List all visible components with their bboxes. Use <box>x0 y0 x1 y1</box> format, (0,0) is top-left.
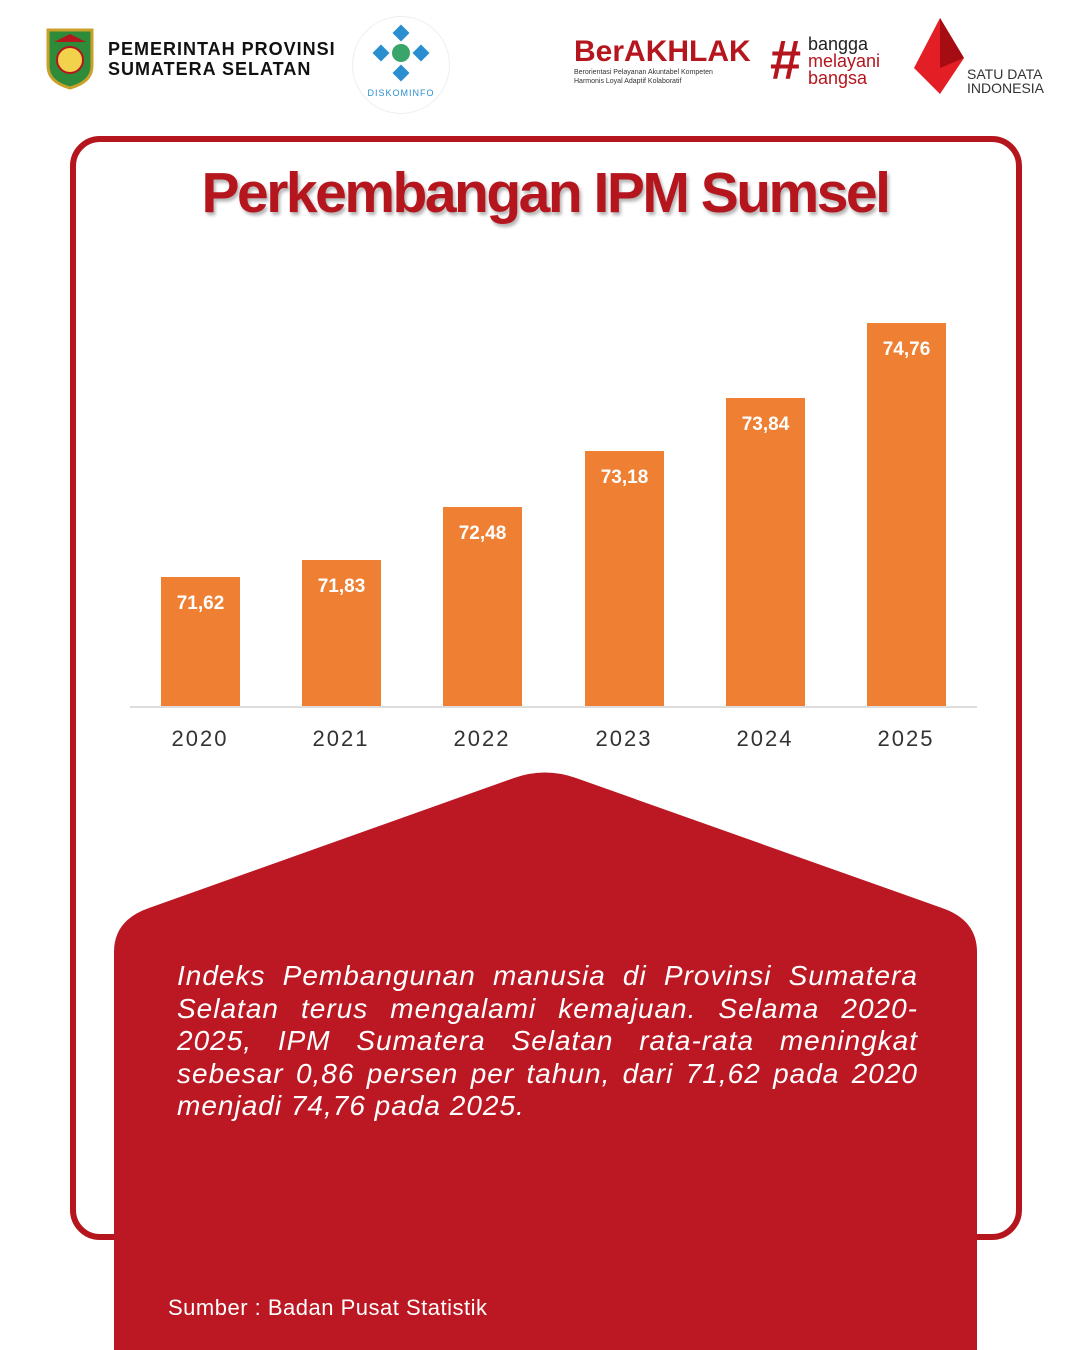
header: province name: PEMERINTAH PROVINSI <box>108 39 336 59</box>
bar chart: 2024 <box>737 726 793 751</box>
bar chart <box>130 323 977 751</box>
header: BerAKHLAK logo <box>574 35 751 85</box>
header: bangga melayani bangsa: # <box>770 28 801 91</box>
title: Perkembangan IPM Sumsel <box>202 161 888 225</box>
bar 2024 <box>726 398 805 706</box>
description text: 2025, IPM Sumatera Selatan rata-rata meningkat <box>177 1025 918 1056</box>
header: bangga melayani bangsa <box>770 28 880 91</box>
header: BerAKHLAK logo: Harmonis Loyal Adaptif Kolaboratif <box>574 78 681 85</box>
description text: menjadi 74,76 pada 2025. <box>177 1090 525 1121</box>
bar chart: 2021 <box>313 726 369 751</box>
bar chart: 2023 <box>596 726 652 751</box>
header: bangga melayani bangsa: bangga <box>808 34 868 54</box>
bar 2025 <box>867 323 946 706</box>
header: Satu Data Indonesia <box>914 18 1044 96</box>
header: diskominfo logo <box>352 16 450 114</box>
red description panel <box>114 772 977 1350</box>
bar 2021: 71,83 <box>318 576 365 597</box>
bar 2023: 73,18 <box>601 467 648 488</box>
header: diskominfo logo: DISKOMINFO <box>367 88 434 98</box>
header: bangga melayani bangsa: bangsa <box>808 68 867 88</box>
bar 2023 <box>585 451 664 706</box>
description text: Selatan terus mengalami kemajuan. Selama 2020- <box>177 992 918 1024</box>
description text <box>176 960 918 1121</box>
bar chart: 2022 <box>454 726 510 751</box>
header: BerAKHLAK logo: Berorientasi Pelayanan Akuntabel Kompeten <box>574 69 713 76</box>
header: Satu Data Indonesia: INDONESIA <box>967 80 1044 96</box>
bar 2020: 71,62 <box>177 593 224 614</box>
source: Sumber : Badan Pusat Statistik <box>168 1295 488 1320</box>
bar 2022: 72,48 <box>459 523 506 544</box>
year labels: 2020 <box>172 726 228 751</box>
header: province name <box>108 39 336 79</box>
description text: sebesar 0,86 persen per tahun, dari 71,62 pada 2020 <box>177 1058 918 1088</box>
header: province name: SUMATERA SELATAN <box>108 59 311 79</box>
main frame <box>70 136 1022 1240</box>
bar 2020 <box>161 577 240 706</box>
header: bangga melayani bangsa: melayani <box>808 51 880 71</box>
header: BerAKHLAK logo: BerAKHLAK <box>574 35 751 68</box>
description text: Indeks Pembangunan manusia di Provinsi Sumatera <box>177 960 918 991</box>
bar chart: 2025 <box>878 726 934 751</box>
bar 2024: 73,84 <box>742 414 789 435</box>
header: provincial logo <box>46 28 94 90</box>
bar 2022 <box>443 507 522 706</box>
bar 2025: 74,76 <box>883 339 930 360</box>
bar 2021 <box>302 560 381 706</box>
header: Satu Data Indonesia: SATU DATA <box>967 66 1042 82</box>
